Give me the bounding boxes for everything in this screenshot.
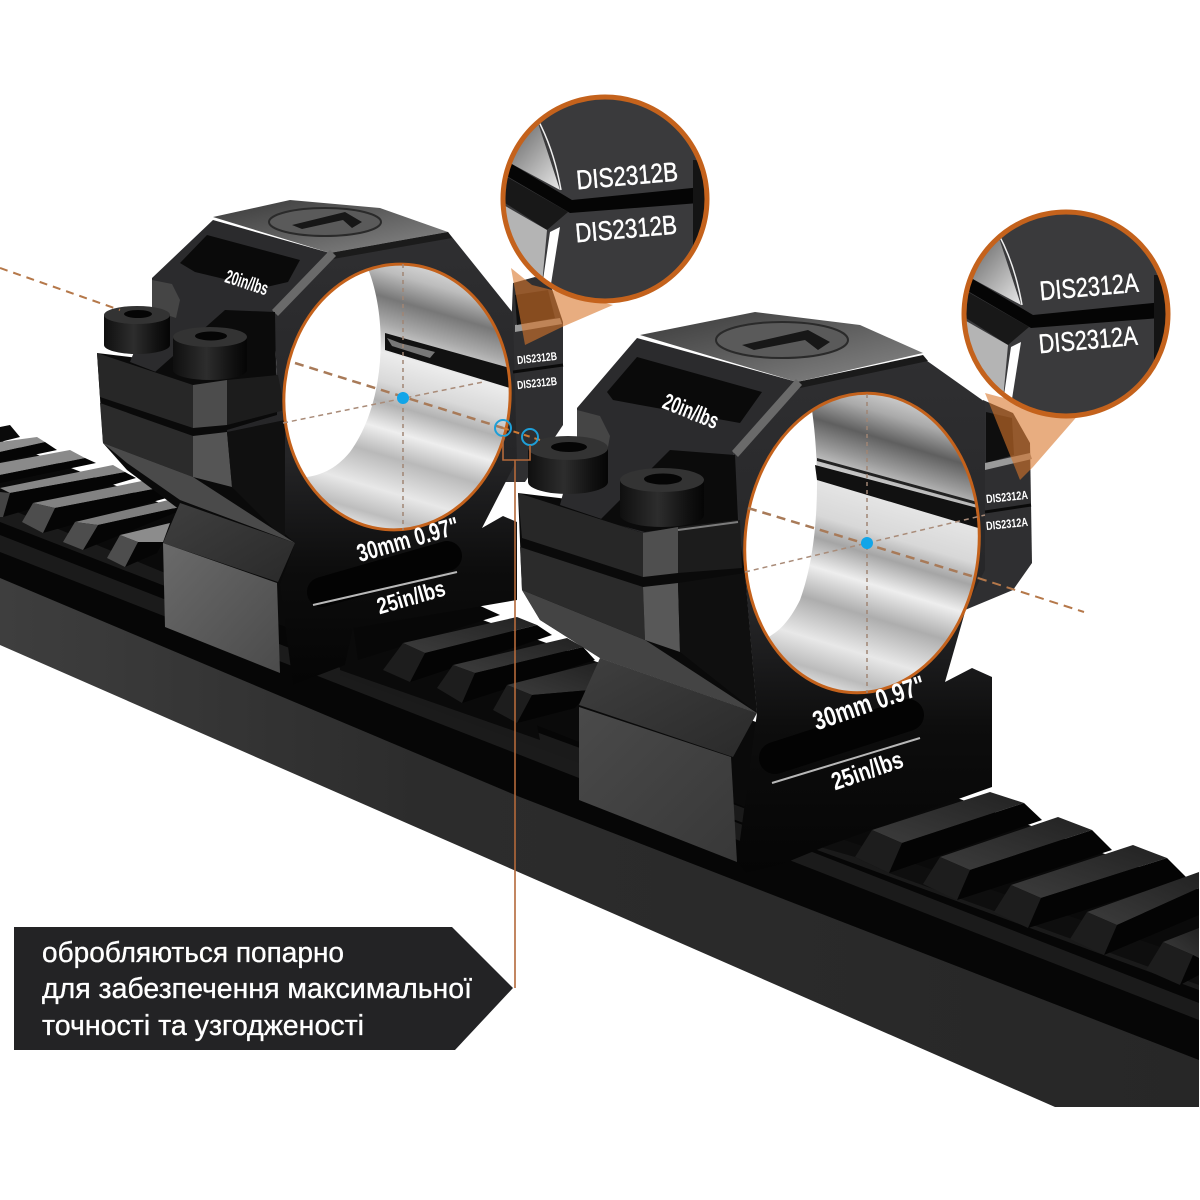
slot — [313, 556, 457, 605]
chamfer face — [560, 338, 797, 533]
centre dot left — [397, 392, 409, 404]
torque window — [180, 235, 300, 288]
rail side face — [0, 575, 1199, 1107]
top face — [640, 312, 923, 382]
bore reflection — [306, 266, 508, 528]
slot — [772, 715, 920, 783]
alignment axis left — [0, 264, 540, 530]
right rail teeth — [809, 767, 1199, 985]
upper ear left — [97, 353, 193, 428]
ear wedge — [103, 443, 295, 543]
upper ear strip — [193, 380, 227, 428]
lower ear strip — [643, 583, 680, 652]
side seam — [985, 505, 1031, 512]
serial lower: DIS2312A — [1037, 321, 1139, 359]
bore caption: 30mm 0.97" — [354, 512, 462, 568]
bore slit — [385, 333, 510, 388]
lower ear strip — [193, 432, 232, 487]
rail base strip centre — [340, 660, 1199, 990]
magnifier A — [961, 212, 1174, 416]
strip ledge — [985, 453, 1032, 470]
lower ear wedge — [522, 590, 757, 713]
body front face — [733, 358, 992, 873]
serial small upper: DIS2312B — [517, 351, 558, 367]
torque label top: 20in/lbs — [222, 267, 271, 300]
connector to callout — [503, 436, 530, 988]
screw recess — [600, 450, 738, 532]
strip recess — [515, 290, 555, 325]
upper ear left — [518, 493, 643, 577]
torque label top: 20in/lbs — [659, 388, 723, 434]
logo disc — [269, 208, 381, 236]
side strip — [505, 277, 563, 482]
groove stripe — [508, 164, 693, 213]
screw recess — [155, 310, 276, 386]
bore slit — [815, 465, 985, 530]
chamfer block light — [577, 410, 610, 458]
callout line three: точності та узгодженості — [42, 1010, 364, 1042]
body front face — [227, 232, 517, 685]
white sliver — [1004, 342, 1021, 399]
serial small upper: DIS2312A — [985, 488, 1029, 506]
rail tooth base — [0, 505, 170, 588]
chamfer edge highlight — [272, 250, 336, 316]
silver top wedge — [512, 125, 560, 190]
groove facet — [966, 292, 1029, 345]
marker circle two — [522, 429, 538, 445]
centre dot right — [861, 537, 873, 549]
serial upper: DIS2312A — [1038, 268, 1140, 306]
callout line one: обробляються попарно — [42, 937, 344, 969]
rail shoulder highlight — [0, 535, 1199, 1020]
serial upper: DIS2312B — [575, 157, 679, 195]
rail top surface — [0, 440, 1199, 1000]
upper ear right — [227, 375, 285, 425]
silver lower wedge — [966, 321, 1008, 392]
ear underlay — [97, 353, 300, 560]
edge strip — [693, 160, 704, 245]
logo disc — [716, 322, 848, 358]
top face — [213, 200, 448, 253]
ear underlay — [518, 493, 757, 713]
screw front — [173, 327, 247, 380]
silver top wedge — [973, 240, 1021, 305]
white sliver — [543, 227, 560, 284]
bore caption: 30mm 0.97" — [809, 670, 929, 736]
marker circle one — [495, 420, 511, 436]
bore slit light — [387, 338, 435, 358]
rail black shoulder — [0, 515, 1199, 1060]
ear highlight — [678, 522, 738, 530]
picatinny rail — [0, 425, 1199, 1107]
bore reflection — [769, 394, 978, 692]
lower ear left — [520, 547, 645, 640]
groove facet — [505, 177, 568, 230]
alignment axis right — [745, 394, 1084, 693]
torque window — [607, 357, 762, 423]
centre rail teeth — [340, 598, 598, 740]
screw back — [528, 436, 608, 494]
bore slit light — [817, 458, 975, 504]
upper ear right — [678, 520, 742, 573]
side seam — [513, 365, 563, 372]
zoom beam left — [511, 268, 613, 345]
foot front — [163, 543, 280, 673]
foot front — [579, 707, 737, 862]
foot top — [579, 658, 757, 757]
serial lower: DIS2312B — [574, 210, 678, 248]
upper ear strip — [643, 527, 678, 577]
callout — [14, 927, 513, 1050]
strip recess — [986, 412, 1014, 463]
groove stripe — [969, 279, 1154, 328]
side strip — [965, 400, 1032, 610]
left ring mount — [97, 200, 563, 685]
ring bore — [743, 392, 981, 694]
arc glint — [999, 235, 1022, 305]
top bevel — [797, 355, 928, 388]
ring bore — [282, 262, 512, 532]
torque label bottom: 25in/lbs — [374, 575, 448, 619]
serial small lower: DIS2312B — [517, 376, 558, 392]
callout line two: для забезпечення максимальної — [42, 973, 472, 1005]
lower ear left — [100, 403, 193, 477]
lower ear right — [678, 573, 757, 713]
foot top — [163, 503, 295, 582]
torque label bottom: 25in/lbs — [828, 746, 907, 796]
edge strip — [1154, 275, 1166, 360]
right ring mount — [518, 312, 1032, 873]
screw front — [620, 468, 704, 527]
serial small lower: DIS2312A — [985, 515, 1029, 533]
top bevel — [330, 232, 452, 259]
chamfer face — [130, 220, 330, 385]
chamfer block light — [152, 280, 180, 318]
lower ear right — [227, 420, 285, 540]
magnifier B — [500, 97, 713, 301]
strip ledge — [515, 318, 562, 332]
screw back — [104, 306, 170, 354]
arc glint — [538, 120, 561, 190]
chamfer edge highlight — [732, 379, 802, 457]
zoom beam right — [985, 393, 1080, 480]
left rail teeth — [0, 425, 180, 567]
silver lower wedge — [506, 206, 547, 277]
